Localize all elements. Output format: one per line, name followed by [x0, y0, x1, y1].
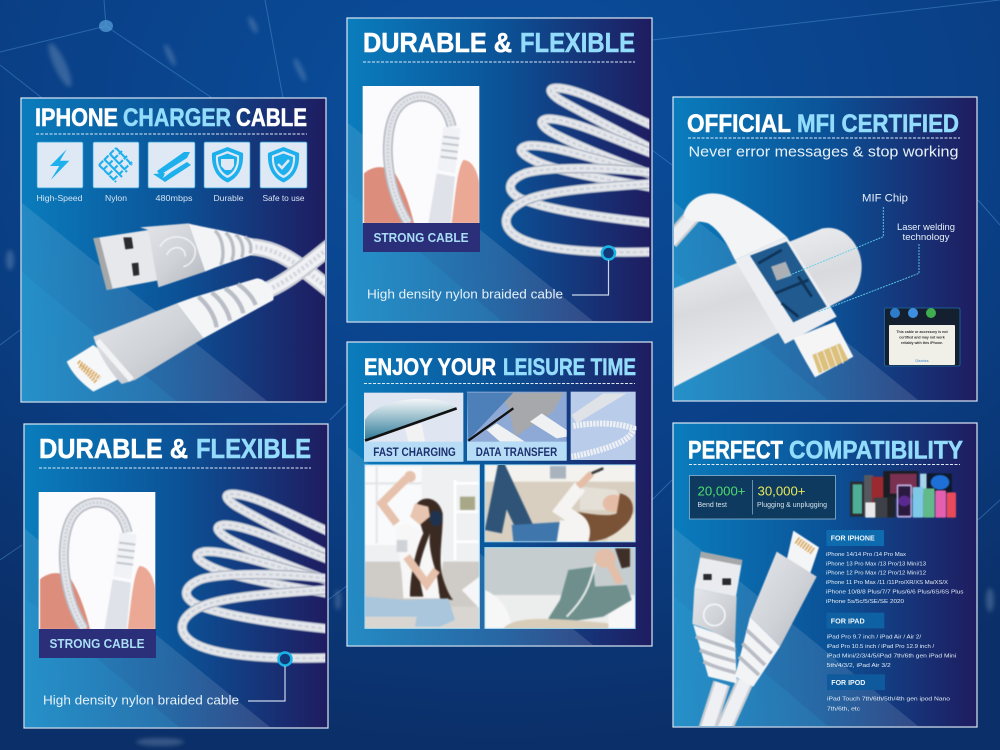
title: MFI CERTIFIED: [797, 110, 959, 138]
lightning plug: [735, 617, 780, 687]
panel background: [673, 423, 977, 727]
panel background: [347, 18, 652, 322]
compatibility: iPad: 5th/4/3/2, iPad Air 3/2: [827, 663, 891, 669]
compatibility: iPod: FOR IPOD: [831, 678, 866, 687]
compatibility: iPod: iPad Touch 7th/6th/5th/4th gen ipod Nano: [827, 697, 950, 703]
compatibility: iPod: 7th/6th, etc: [827, 706, 860, 712]
braided cable stub: [670, 213, 695, 242]
error message popup: reliably with this iPhone.: [901, 341, 943, 345]
compatibility: iPhone: FOR IPHONE: [831, 534, 875, 542]
photo: fast charging: [364, 393, 463, 462]
illustration: lightning connector on tube: [670, 193, 862, 388]
photo: strong cable: STRONG CABLE: [374, 230, 469, 245]
title: CHARGER: [123, 104, 231, 132]
icon: durable shield: [204, 142, 250, 203]
photo: woman with headphones: [365, 465, 479, 628]
stats box: 30,000+: [758, 484, 806, 498]
silver tube: [672, 228, 862, 388]
USB plug: [693, 625, 737, 683]
compatibility: iPhone: iPhone 13 Pro Max /13 Pro/13 Mini/13: [826, 561, 926, 567]
callout: cable marker: High density nylon braided cable: [43, 694, 239, 708]
icon: 480mbps arrows: 480mbps: [156, 193, 192, 203]
title: FLEXIBLE: [196, 433, 311, 464]
strain relief: [683, 193, 787, 260]
coiled nylon cable: [182, 494, 333, 658]
device lineup: [850, 471, 956, 518]
icon: safe to use shield: [260, 142, 307, 203]
callout: laser welding: [818, 222, 955, 312]
photo: strong cable: [39, 492, 156, 658]
panel background: [673, 97, 977, 401]
callout: MIF chip: MIF Chip: [862, 192, 908, 204]
panel background: [21, 98, 326, 402]
title: ENJOY YOUR: [364, 354, 496, 381]
compatibility: iPhone: iPhone 11 Pro Max /11 /11Pro/XR/XS Ma/XS/X: [826, 580, 948, 586]
icon: safe to use shield: Safe to use: [262, 193, 305, 203]
title: PERFECT: [688, 436, 783, 464]
cables and connectors: [67, 223, 337, 392]
compatibility: iPhone: iPhone 5s/5c/5/SE/SE 2020: [826, 599, 904, 605]
callout: cable marker: [367, 246, 615, 302]
panel background: [24, 424, 328, 728]
callout: laser welding: technology: [902, 232, 950, 242]
photo: woman lying on sofa: [485, 465, 635, 542]
error message popup: [884, 308, 960, 366]
compatibility: iPod: [827, 674, 950, 712]
compatibility: iPad: iPad Pro 9.7 inch / iPad Air / Air 2/: [827, 635, 922, 641]
photo: data transfer: [467, 392, 567, 461]
icon: nylon weave: Nylon: [105, 193, 127, 203]
compatibility: iPhone: iPhone 10/8/8 Plus/7/7 Plus/6/6 Plus/6S/6S Plus: [826, 589, 964, 595]
stats box: Bend test: [698, 500, 728, 509]
compatibility: iPad: FOR IPAD: [831, 616, 865, 625]
compatibility: iPhone: iPhone 14/14 Pro /14 Pro Max: [826, 552, 906, 558]
compatibility: iPhone: iPhone 12 Pro Max /12 Pro/12 Mini/12: [826, 571, 926, 577]
stats box: Plugging & unplugging: [757, 500, 827, 509]
panel: official MFi certified: [670, 97, 977, 401]
callout: MIF chip: [785, 192, 908, 277]
cable illustration: USB and lightning: [692, 531, 819, 730]
error message popup: certified and may not work: [899, 336, 945, 340]
connector housing: [735, 237, 837, 344]
circuit board: [750, 242, 827, 322]
error message popup: Dismiss: [915, 359, 929, 363]
photo: fast charging: FAST CHARGING: [373, 447, 456, 459]
title: OFFICIAL: [687, 110, 791, 138]
feature icons row: [36, 142, 307, 203]
photo: data transfer: DATA TRANSFER: [476, 447, 558, 459]
title: DURABLE &: [39, 433, 188, 464]
compatibility: iPad: [826, 613, 956, 669]
compatibility: iPad: iPad Pro 10.5 inch / iPad Pro 12.9 inch /: [827, 644, 935, 650]
lightning tip: [793, 322, 853, 377]
coiled nylon cable: [506, 88, 657, 252]
icon: durable shield: Durable: [214, 193, 244, 203]
callout: cable marker: [43, 652, 292, 708]
title: DURABLE &: [363, 27, 512, 58]
lightning connector: [67, 278, 274, 392]
braided cables: [250, 242, 337, 295]
panel: perfect compatibility: [673, 423, 977, 730]
stats box: 20,000+: [698, 484, 746, 498]
compatibility: iPad: iPad Mini/2/3/4/5/iPad 7th/6th gen iPad Mini: [827, 653, 956, 659]
icon: 480mbps arrows: [148, 142, 195, 203]
photo: braided cable close-up: [571, 392, 636, 460]
icon: high speed: High-Speed: [36, 193, 83, 203]
panel: durable and flexible (bottom left): [24, 424, 333, 728]
error message popup: This cable or accessory is not: [896, 330, 948, 334]
panel: iPhone charger cable: [21, 98, 337, 402]
panel: durable and flexible (top centre): [347, 18, 657, 322]
icon: high speed: [36, 142, 83, 203]
title: CABLE: [236, 104, 307, 132]
panel: enjoy your leisure time: [347, 342, 652, 646]
USB connector: [93, 223, 255, 290]
compatibility: iPhone: [826, 530, 964, 605]
stats box: [690, 476, 836, 519]
photo: man relaxing on sofa: [485, 548, 635, 628]
title: LEISURE TIME: [503, 354, 636, 381]
title: FLEXIBLE: [520, 27, 635, 58]
title: COMPATIBILITY: [789, 436, 963, 464]
photo: strong cable: [363, 86, 480, 252]
title: IPHONE: [35, 104, 118, 132]
icon: nylon weave: [93, 142, 139, 203]
callout: cable marker: High density nylon braided cable: [367, 288, 563, 302]
callout: laser welding: Laser welding: [897, 222, 955, 232]
panel background: [347, 342, 652, 646]
photo: strong cable: STRONG CABLE: [50, 636, 145, 651]
subtitle: Never error messages & stop working: [688, 144, 958, 160]
